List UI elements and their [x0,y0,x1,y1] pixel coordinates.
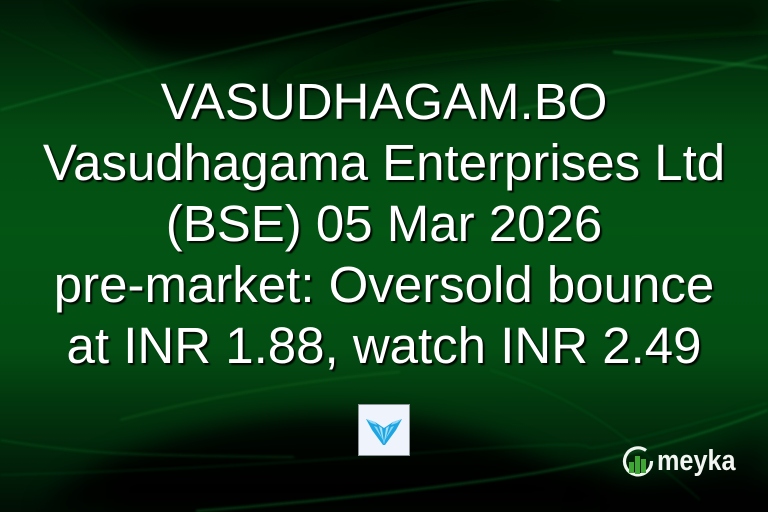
dark top region [60,0,580,62]
icon: company logo [358,404,410,456]
wordmark: meyka [657,445,736,477]
title: Vasudhagama Enterprises Ltd [43,134,725,191]
title: (BSE) 05 Mar 2026 [166,195,602,252]
title: VASUDHAGAM.BO [161,73,607,130]
dark bottom hump [40,414,660,512]
title: pre-market: Oversold bounce [54,256,714,313]
title: at INR 1.88, watch INR 2.49 [67,317,701,374]
title [43,73,725,374]
icon: meyka ring with bars [622,446,654,476]
logo: meyka [622,445,736,477]
